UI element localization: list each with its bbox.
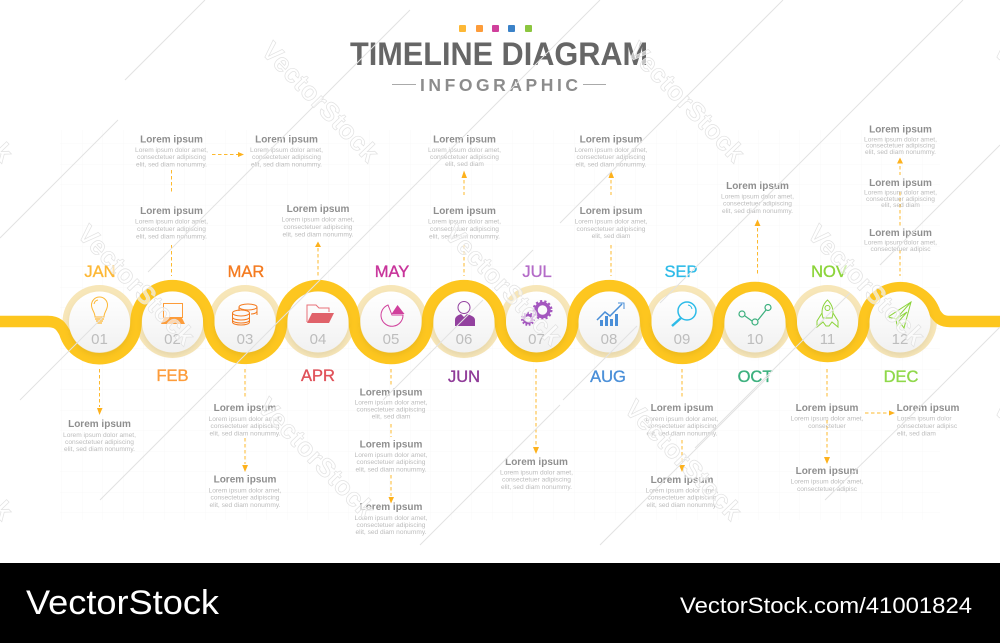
icon: magnifier: [672, 302, 696, 326]
text block: Mar 1: Lorem ipsum: [214, 403, 276, 414]
month labels: JAN: [84, 263, 116, 281]
month labels: FEB: [156, 367, 189, 385]
text block: Jun 1: elit, sed diam: [445, 161, 484, 168]
text block: Feb 1: Lorem ipsum: [140, 134, 203, 146]
text block: Dec 1: elit, sed diam nonummy.: [865, 149, 936, 156]
step numbers: 07: [528, 331, 545, 348]
text block: Nov 3: Lorem ipsum dolor: [897, 416, 952, 422]
text block: Jan: elit, sed diam nonummy.: [64, 446, 135, 453]
step numbers: 11: [820, 331, 835, 348]
text block: Dec 1: Lorem ipsum: [869, 124, 932, 136]
text block: Oct: Lorem ipsum: [726, 181, 789, 192]
step numbers: 03: [237, 331, 253, 348]
text block: Sep 1: Lorem ipsum dolor amet,: [646, 416, 719, 423]
text block: May 1: consectetuer adipiscing: [357, 406, 426, 414]
text block: May 3: Lorem ipsum dolor amet,: [355, 515, 428, 522]
text block: Feb 3: Lorem ipsum dolor amet,: [250, 147, 323, 154]
text block: Oct: [721, 181, 794, 215]
footer logo: VectorStock: [26, 584, 220, 622]
watermark text: VectorStock: [439, 219, 568, 351]
text block: Nov 2: [791, 466, 864, 493]
text block: May 2: elit, sed diam nonummy.: [356, 466, 427, 474]
text block: Feb 2: Lorem ipsum: [140, 206, 203, 217]
text block: Jun 2: [428, 206, 501, 240]
watermark text: VectorStock: [619, 394, 748, 526]
text block: Sep 1: [646, 403, 719, 438]
text block: Aug 1: Lorem ipsum: [580, 134, 642, 146]
text block: Dec 2: Lorem ipsum dolor amet,: [864, 190, 937, 196]
step numbers: 05: [383, 331, 399, 348]
text block: Dec 3: [864, 228, 937, 253]
text block: Nov 3: [897, 403, 959, 438]
text block: Sep 2: elit, sed diam nonummy.: [647, 502, 718, 509]
step numbers: 04: [310, 331, 326, 348]
text block: Feb 1: elit, sed diam nonummy.: [136, 162, 207, 168]
step numbers: 10: [747, 331, 763, 348]
text block: May 1: Lorem ipsum: [360, 388, 422, 398]
icon: folder: [307, 305, 334, 323]
text block: Sep 1: Lorem ipsum: [651, 403, 713, 414]
text block: Aug 2: [575, 206, 648, 240]
step numbers: 12: [892, 331, 908, 348]
text block: Feb 2: elit, sed diam nonummy.: [136, 234, 207, 240]
icon: laptop: [161, 304, 185, 324]
text block: Nov 1: [791, 403, 864, 430]
text block: Jun 2: consectetuer adipiscing: [430, 226, 499, 233]
text block: Dec 1: Lorem ipsum dolor amet,: [864, 136, 937, 144]
text block: May 1: Lorem ipsum dolor amet,: [355, 400, 428, 406]
timeline ribbon and circles: [0, 284, 1000, 359]
text block: Dec 1: consectetuer adipiscing: [866, 142, 935, 150]
text block: Feb 1: consectetuer adipiscing: [137, 154, 206, 161]
icon: gears: [522, 301, 552, 325]
text block: May 2: consectetuer adipiscing: [357, 459, 426, 466]
month labels: SEP: [664, 263, 698, 281]
color squares: [459, 25, 532, 32]
text block: Nov 1: Lorem ipsum dolor amet,: [791, 416, 864, 422]
text block: Nov 1: consectetuer: [808, 423, 847, 430]
icon: connected nodes: [739, 304, 771, 325]
text block: Feb 1: Lorem ipsum dolor amet,: [135, 147, 208, 154]
text block: Jul: elit, sed diam nonummy.: [501, 484, 572, 491]
footer url: VectorStock.com/41001824: [680, 593, 972, 618]
text block: Apr: Lorem ipsum: [287, 204, 349, 215]
month labels: [84, 263, 918, 386]
subheading: INFOGRAPHIC: [420, 75, 578, 95]
watermark text: VectorStock: [802, 219, 931, 351]
text block: Feb 3: Lorem ipsum: [255, 134, 318, 146]
text block: Jul: Lorem ipsum dolor amet,: [500, 470, 573, 476]
text block: Mar 1: elit, sed diam nonummy.: [210, 430, 281, 438]
text block: Feb 2: Lorem ipsum dolor amet,: [135, 218, 208, 226]
month labels: JUL: [522, 263, 552, 281]
month labels: MAR: [228, 263, 264, 281]
month labels: AUG: [590, 368, 626, 386]
connector arrows: [97, 152, 903, 504]
text block: Apr: Lorem ipsum dolor amet,: [282, 216, 355, 224]
text block: Feb 2: [135, 206, 208, 240]
text block: Sep 1: elit, sed diam nonummy.: [647, 430, 718, 438]
text block: Jun 1: Lorem ipsum: [433, 134, 496, 146]
step numbers: 08: [601, 331, 617, 348]
text block: Dec 3: Lorem ipsum dolor amet,: [864, 240, 937, 246]
text block: Aug 2: Lorem ipsum: [580, 206, 642, 217]
text block: Dec 1: [864, 124, 937, 156]
text block: Feb 3: elit, sed diam nonummy.: [251, 162, 322, 168]
month labels: JUN: [448, 368, 480, 386]
text block: May 1: elit, sed diam: [372, 414, 411, 420]
text block: Nov 2: Lorem ipsum: [796, 466, 858, 477]
step numbers: [91, 331, 908, 348]
text block: Apr: consectetuer adipiscing: [284, 224, 353, 231]
text block: Dec 2: consectetuer adipiscing: [866, 196, 935, 203]
step numbers: 01: [91, 331, 108, 348]
text block: Sep 2: [646, 475, 719, 509]
month labels: MAY: [375, 263, 409, 281]
icon: coins: [232, 304, 257, 325]
icon: growth chart: [597, 303, 624, 326]
text block: Jul: Lorem ipsum: [505, 457, 568, 468]
text block: Jan: [63, 419, 136, 453]
text block: May 3: elit, sed diam nonummy.: [356, 529, 427, 536]
text block: Nov 2: Lorem ipsum dolor amet,: [791, 478, 864, 486]
text block: Dec 3: Lorem ipsum: [869, 228, 932, 239]
watermark text: VectorStock: [72, 219, 201, 351]
text block: May 3: consectetuer adipiscing: [357, 522, 426, 529]
text block: Nov 3: elit, sed diam: [897, 430, 936, 438]
text block: Jun 1: consectetuer adipiscing: [430, 154, 499, 161]
step numbers: 06: [456, 331, 472, 348]
text block: Jan: Lorem ipsum: [68, 419, 131, 430]
text block: Mar 1: consectetuer adipiscing: [211, 423, 280, 430]
white circles: [69, 292, 930, 352]
pale rings: [62, 284, 937, 359]
text block: Jun 2: elit, sed diam nonummy.: [429, 234, 500, 240]
text block: Mar 2: consectetuer adipiscing: [211, 494, 280, 502]
text block: Nov 3: Lorem ipsum: [897, 403, 959, 414]
text block: Sep 2: Lorem ipsum: [651, 475, 713, 486]
text block: Feb 2: consectetuer adipiscing: [137, 226, 206, 233]
text block: Feb 1: [135, 134, 208, 168]
watermark text: [0, 36, 1000, 526]
text block: Mar 1: [209, 403, 282, 438]
watermark text: VectorStock: [256, 36, 385, 168]
text block: Dec 2: Lorem ipsum: [869, 178, 932, 189]
text block: Oct: Lorem ipsum dolor amet,: [721, 194, 794, 200]
text block: Dec 3: consectetuer adipisc: [870, 246, 931, 253]
text block: Apr: [282, 204, 355, 238]
text block: Oct: consectetuer adipiscing: [723, 200, 792, 208]
text block: May 2: [355, 440, 428, 474]
heading: TIMELINE DIAGRAM: [350, 36, 648, 72]
text block: Nov 2: consectetuer adipisc: [797, 486, 858, 493]
step numbers: 02: [164, 331, 181, 348]
yellow ribbon: [0, 286, 1000, 359]
text block: Jun 1: Lorem ipsum dolor amet,: [428, 147, 501, 154]
footer bar: [0, 563, 1000, 643]
text block: Jan: consectetuer adipiscing: [65, 439, 134, 446]
text block: Dec 2: [864, 178, 937, 209]
icon: light bulb: [92, 297, 108, 323]
title block: [350, 25, 648, 95]
icon: rocket: [817, 300, 838, 327]
month labels: DEC: [884, 368, 918, 386]
text block: May 1: [355, 388, 428, 420]
text block: Mar 2: Lorem ipsum dolor amet,: [209, 488, 282, 494]
text block: Aug 1: elit, sed diam nonummy.: [576, 162, 647, 168]
text block: Mar 2: Lorem ipsum: [214, 474, 276, 486]
icon: person: [455, 302, 475, 326]
text block: May 3: [355, 502, 428, 536]
text block: Aug 2: Lorem ipsum dolor amet,: [575, 218, 648, 226]
icon: paper plane: [888, 302, 911, 328]
text block: Jun 2: Lorem ipsum: [433, 206, 496, 217]
watermark text: VectorStock: [252, 392, 381, 524]
text block: May 2: Lorem ipsum dolor amet,: [355, 452, 428, 459]
text block: Feb 3: [250, 134, 323, 168]
text block: Aug 1: Lorem ipsum dolor amet,: [575, 147, 648, 154]
text block: Jun 1: [428, 134, 501, 168]
text block: May 2: Lorem ipsum: [360, 440, 422, 450]
text block: Jan: Lorem ipsum dolor amet,: [63, 432, 136, 439]
text block: Sep 2: Lorem ipsum dolor amet,: [646, 488, 719, 494]
text block: Mar 2: [209, 474, 282, 509]
text block: Jul: consectetuer adipiscing: [502, 476, 571, 484]
step numbers: 09: [674, 331, 690, 348]
month labels: OCT: [738, 368, 772, 386]
text block: Nov 3: consectetuer adipisc: [897, 423, 958, 430]
text block: Aug 2: consectetuer adipiscing: [577, 226, 646, 233]
text block: Mar 1: Lorem ipsum dolor amet,: [209, 416, 282, 423]
text block: Jul: [500, 457, 573, 491]
text block: Oct: elit, sed diam nonummy.: [722, 208, 793, 215]
text block: Feb 3: consectetuer adipiscing: [252, 154, 321, 161]
text block: Apr: elit, sed diam nonummy.: [283, 232, 354, 238]
text block: Sep 2: consectetuer adipiscing: [648, 494, 717, 502]
text block: May 3: Lorem ipsum: [360, 502, 422, 513]
icon: pie chart: [381, 305, 404, 326]
month labels: NOV: [811, 263, 847, 281]
month labels: APR: [301, 367, 335, 385]
text block: Jun 2: Lorem ipsum dolor amet,: [428, 218, 501, 226]
text block: Mar 2: elit, sed diam nonummy.: [210, 502, 281, 509]
text block: Aug 1: [575, 134, 648, 168]
text block: Aug 2: elit, sed diam: [592, 233, 631, 240]
text block: Sep 1: consectetuer adipiscing: [648, 423, 717, 430]
text block: Nov 1: Lorem ipsum: [796, 403, 858, 414]
text block: Aug 1: consectetuer adipiscing: [577, 154, 646, 161]
text block: Dec 2: elit, sed diam: [881, 202, 920, 209]
watermark text: VectorStock: [622, 36, 751, 168]
